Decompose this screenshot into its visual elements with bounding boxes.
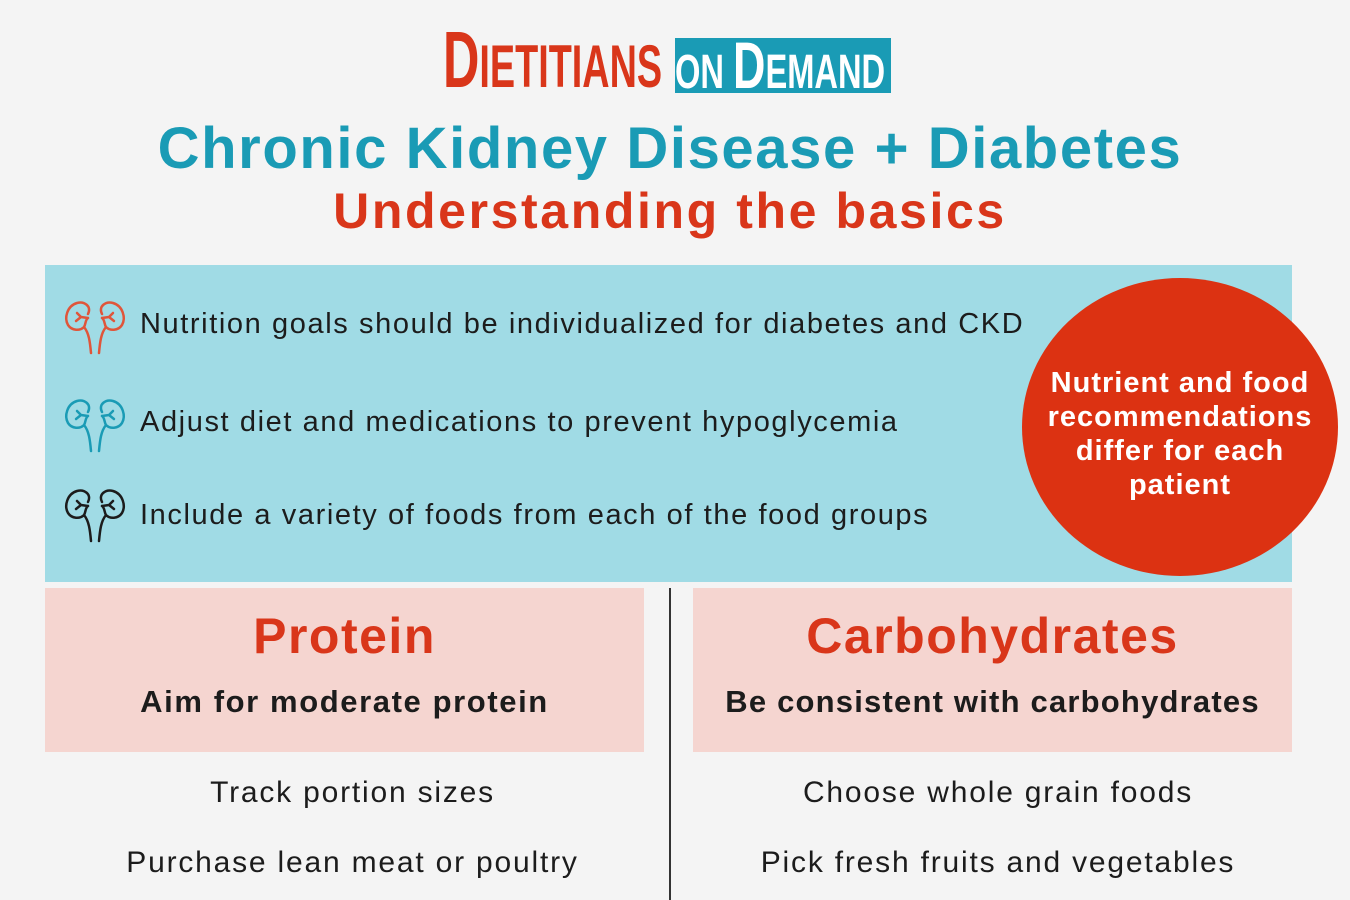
callout circle: recommendations bbox=[1048, 401, 1312, 433]
protein tip 2: Purchase lean meat or poultry bbox=[126, 846, 579, 879]
callout circle: Nutrient and food bbox=[1051, 367, 1309, 399]
logo text: Dietitians: DIETITIANS bbox=[443, 15, 662, 104]
callout circle: differ for each bbox=[1076, 435, 1284, 467]
divider bbox=[669, 588, 671, 900]
icon: kidney teal bbox=[65, 399, 125, 452]
carb tip 1: Choose whole grain foods bbox=[803, 776, 1193, 809]
subheading: Aim for moderate protein bbox=[140, 684, 549, 719]
callout circle bbox=[1022, 278, 1338, 576]
protein tip 1: Track portion sizes bbox=[210, 776, 495, 809]
callout circle: patient bbox=[1129, 469, 1231, 501]
subtitle: Understanding the basics bbox=[333, 183, 1007, 239]
icon: kidney black bbox=[64, 489, 126, 542]
panel: carbohydrates bbox=[693, 588, 1292, 752]
title: Chronic Kidney Disease + Diabetes bbox=[158, 116, 1182, 181]
bullet 3: Include a variety of foods from each of the food groups bbox=[140, 499, 929, 531]
heading: carbohydrates: Carbohydrates bbox=[806, 608, 1179, 664]
heading: protein: Protein bbox=[253, 608, 436, 664]
subheading: Be consistent with carbohydrates bbox=[725, 684, 1260, 719]
icon: kidney orange bbox=[65, 301, 125, 354]
panel: key points bbox=[45, 265, 1292, 582]
carb tip 2: Pick fresh fruits and vegetables bbox=[761, 846, 1235, 879]
logo bbox=[443, 15, 891, 104]
bullet 2: Adjust diet and medications to prevent hypoglycemia bbox=[140, 406, 899, 438]
panel: protein bbox=[45, 588, 644, 752]
bullet 1: Nutrition goals should be individualized for diabetes and CKD bbox=[140, 308, 1024, 340]
